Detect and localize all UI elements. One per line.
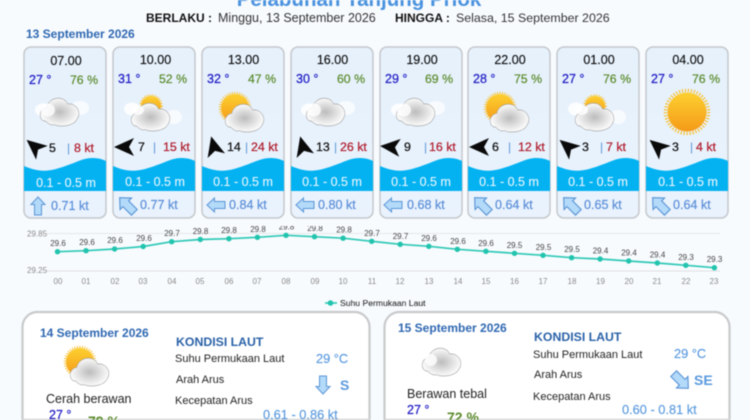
panel: 15 September forecast [384,312,730,420]
chart legend: Suhu Permukaan Laut [340,298,426,308]
card: 13.00: 47 % [248,72,276,86]
card: 13.00: 13.00 [228,53,259,67]
sea surface temperature line chart: 29.8 [336,226,352,234]
card: 04.00: 0.1 - 0.5 m [658,175,718,189]
card: 01.00: 7 kt [606,140,627,154]
card: 07.00: 0.1 - 0.5 m [36,176,96,190]
card: 16.00: 0.1 - 0.5 m [302,175,362,189]
card: 10.00: 0.77 kt [140,198,178,212]
sea surface temperature line chart: 29.3 [678,253,694,262]
validity period: BERLAKU : [146,11,212,25]
card: 13.00: | [245,140,248,154]
card: 22.00: 22.00 [494,53,526,67]
sea surface temperature line chart: 18 [568,277,577,286]
sea surface temperature line chart: 21 [653,277,662,286]
sea surface temperature line chart: 29.8 [193,227,209,236]
sea surface temperature line chart: 29.5 [507,241,523,250]
card: 01.00: 3 [582,140,589,154]
sea conditions heading: KONDISI LAUT [176,335,264,349]
weather description: Berawan tebal [407,387,487,401]
sea conditions labels [175,353,284,407]
sea surface temperature line chart: 29.8 [307,224,323,233]
sea surface temperature line chart: 29.4 [621,248,637,258]
card: 01.00: 27 ° [562,72,584,86]
card: 07.00: 8 kt [74,141,95,155]
sea surface temperature line chart: 23 [710,277,719,286]
card: 10.00: | [153,140,156,154]
card: 22.00: 12 kt [518,140,545,154]
current direction [668,368,713,394]
sea surface temperature line chart: 29.6 [50,239,66,248]
sea surface temperature line chart: 11 [368,277,377,286]
sea conditions labels: Arah Arus [534,369,583,381]
current direction: S [340,377,349,393]
sea surface temperature line chart: 29.6 [450,237,466,246]
card: 07.00: 76 % [70,73,98,87]
sea surface temperature line chart: 29.7 [364,229,380,238]
validity period: HINGGA : [395,11,450,25]
card: 22.00: | [508,140,511,154]
sea surface temperature line chart: 29.8 [250,225,266,234]
sea surface temperature line chart: 29.7 [393,232,409,241]
sea surface temperature line chart: 29.3 [707,255,723,264]
sea surface temperature line chart: 29.4 [650,250,666,260]
sea surface temperature line chart: 29.7 [164,229,180,238]
card: 10.00: 31 ° [118,72,140,86]
sea conditions labels: Arah Arus [176,374,225,386]
sea surface temperature line chart: 19 [596,277,605,286]
card: 16.00 [291,47,373,218]
sea conditions labels: Kecepatan Arus [175,395,253,407]
card: 22.00: 28 ° [473,72,495,86]
weather description: Cerah berawan [46,392,132,406]
card: 19.00: 19.00 [406,53,438,67]
card: 16.00: 16.00 [317,53,348,67]
card: 07.00 [21,47,106,218]
card: 07.00: 5 [49,141,56,155]
sea surface temperature line chart: 29.6 [478,239,494,248]
weather icon [65,347,109,386]
card: 19.00: 29 ° [385,72,407,86]
card: 22.00: 0.64 kt [495,198,533,212]
temperature: 27 ° [407,403,429,417]
panel: 14 September forecast [22,312,370,420]
card: 19.00: 9 [404,140,411,154]
sea surface temperature line chart: 03 [139,277,148,286]
sea surface temperature line chart: 02 [111,277,120,286]
card: 01.00: 0.65 kt [584,198,622,212]
card: 04.00: | [690,140,693,154]
card: 01.00: | [600,140,603,154]
card: 13.00: 14 [227,140,241,154]
card: 04.00: 3 [672,140,679,154]
sea surface temperature line chart: 14 [454,277,463,286]
sea surface temperature line chart: 05 [196,277,205,286]
sea surface temperature line chart: 13 [425,277,434,286]
sea surface temperature line chart: 29.6 [136,234,152,243]
validity period [146,11,610,25]
card: 07.00: 07.00 [50,54,82,68]
sea surface temperature line chart: 08 [282,277,291,286]
panel date: 15 September 2026 [398,321,507,335]
card: 10.00 [113,47,195,218]
current direction [316,376,349,394]
sea surface temperature line chart: 17 [539,277,548,286]
card: 13.00: 0.1 - 0.5 m [213,175,273,189]
sea surface temperature line chart: 29.4 [593,246,609,256]
weather icon [422,348,461,376]
card: 16.00: 13 [316,140,330,154]
sea surface temperature line chart: 29.25 [27,266,48,275]
card: 01.00 [554,47,639,218]
sea surface temperature line chart: 09 [311,277,320,286]
card: 07.00: 27 ° [29,73,51,87]
sea surface temperature line chart: 20 [625,277,634,286]
sea surface temperature line chart: 29.6 [107,236,123,245]
sea surface temperature line chart: 15 [482,277,491,286]
validity period: Minggu, 13 September 2026 [218,11,376,25]
validity period: Selasa, 15 September 2026 [456,11,610,25]
card: 01.00: 0.1 - 0.5 m [568,175,628,189]
card: 01.00: 01.00 [583,53,615,67]
sea conditions labels: Kecepatan Arus [533,391,611,403]
card: 04.00 [644,47,728,218]
sea surface temperature line chart: 29.5 [536,243,552,252]
sea conditions labels: Suhu Permukaan Laut [533,349,642,361]
sea surface temperature line chart: 29.85 [27,230,48,238]
sea surface temperature line chart: 29.6 [421,234,437,243]
card: 07.00: | [67,141,70,155]
card: 13.00: 0.84 kt [229,198,267,212]
card: 22.00: 6 [492,140,499,154]
sea surface temperature line chart: 01 [82,277,91,286]
card: 16.00: 30 ° [296,72,318,86]
card: 04.00: 0.64 kt [673,198,711,212]
card: 04.00: 27 ° [651,72,673,86]
sea surface temperature line chart: 29.5 [564,245,580,254]
card: 10.00: 0.1 - 0.5 m [125,175,185,189]
current direction: SE [694,372,713,388]
card: 04.00: 76 % [692,72,720,86]
card: 01.00: 76 % [603,72,631,86]
date heading: 13 September 2026 [26,27,135,41]
card: 04.00: 4 kt [696,140,717,154]
sea surface temperature line chart: 00 [54,277,63,286]
card: 16.00: 60 % [337,72,365,86]
card: 10.00: 15 kt [163,140,190,154]
card: 13.00: 32 ° [207,72,229,86]
card: 13.00 [202,47,284,218]
card: 07.00: 0.71 kt [51,199,89,213]
card: 19.00: 16 kt [429,140,456,154]
sea surface temperature line chart: 29.8 [221,226,237,235]
card: 19.00: 69 % [425,72,453,86]
current speed: 0.60 - 0.81 kt [622,402,697,417]
sea surface temperature line chart: 16 [510,277,519,286]
sea surface temperature line chart: 06 [225,277,234,286]
sea conditions labels [533,349,642,403]
card: 22.00: 0.1 - 0.5 m [479,175,539,189]
card: 19.00: 0.68 kt [407,198,445,212]
sea surface temperature line chart: 07 [253,277,262,286]
sea surface temperature line chart: 04 [168,277,177,286]
card: 10.00: 52 % [159,72,187,86]
sea conditions heading: KONDISI LAUT [534,330,622,344]
card: 16.00: 26 kt [340,140,367,154]
card: 22.00 [468,47,550,218]
sea temperature value: 29 °C [316,351,348,366]
sea temperature value: 29 °C [674,346,706,361]
sea surface temperature line chart: 29.6 [79,238,95,247]
sea surface temperature line chart [27,222,723,286]
card: 10.00: 10.00 [140,53,171,67]
card: 16.00: | [334,140,337,154]
card: 10.00: 7 [138,140,145,154]
sea surface temperature line chart: 29.8 [279,222,295,232]
sea conditions labels: Suhu Permukaan Laut [175,353,284,365]
card: 19.00 [379,47,462,218]
panel date: 14 September 2026 [40,326,149,340]
card: 04.00: 04.00 [672,53,704,67]
card: 16.00: 0.80 kt [318,198,356,212]
sea surface temperature line chart: 12 [396,277,405,286]
card: 19.00: | [424,140,427,154]
sea surface temperature line chart: 10 [339,277,348,286]
sea surface temperature line chart: 22 [682,277,691,286]
card: 19.00: 0.1 - 0.5 m [391,175,451,189]
card: 13.00: 24 kt [251,140,278,154]
card: 22.00: 75 % [514,72,542,86]
